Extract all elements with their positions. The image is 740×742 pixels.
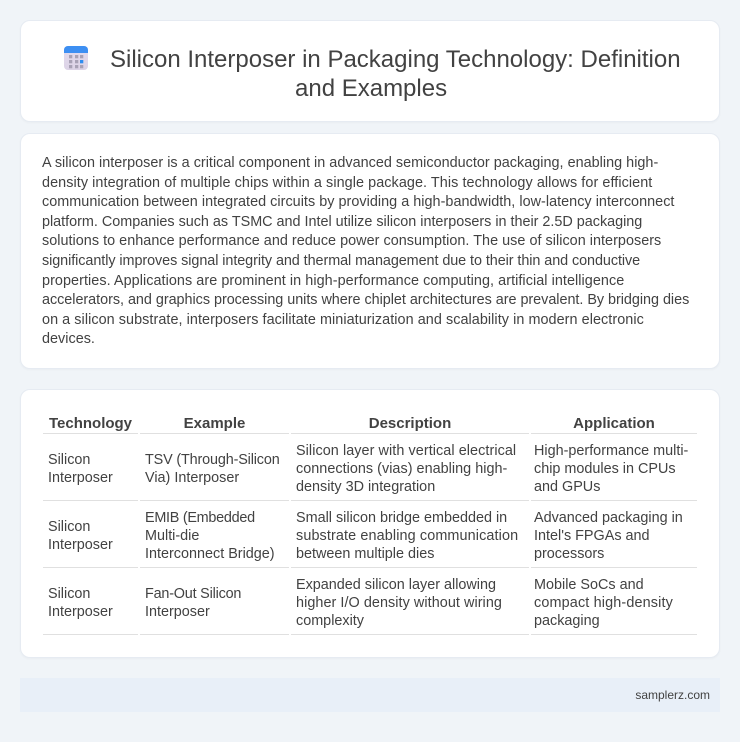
text block: intro paragraph bbox=[42, 155, 689, 347]
table row: EMIB: between multiple dies bbox=[296, 546, 434, 562]
table row: EMIB: Multi-die bbox=[145, 528, 199, 544]
icon: calendar grid chip bbox=[64, 46, 88, 70]
table row: EMIB: processors bbox=[534, 546, 604, 562]
table row: Fan-Out: packaging bbox=[534, 613, 600, 629]
table row: Fan-Out: higher I/O density without wiring bbox=[296, 595, 502, 611]
table row: EMIB bbox=[48, 510, 683, 562]
table header row bbox=[49, 415, 655, 432]
text block: intro paragraph: density integration of multiple chips within a single package. This technology allows for efficient bbox=[42, 175, 652, 191]
footer bar bbox=[20, 678, 720, 712]
table row: Fan-Out: compact high-density bbox=[534, 595, 673, 611]
text block: intro paragraph: significantly improves signal integrity and thermal management due to their thin and conductive bbox=[42, 253, 640, 269]
table row: EMIB: Advanced packaging in bbox=[534, 510, 683, 526]
table: technology examples bbox=[43, 415, 697, 635]
table row: EMIB: Interconnect Bridge) bbox=[145, 546, 275, 562]
table row: Fan-Out: Expanded silicon layer allowing bbox=[296, 577, 496, 593]
table row: TSV: Silicon bbox=[48, 452, 90, 468]
heading: title: Silicon Interposer in Packaging Technology: Definition bbox=[110, 46, 681, 73]
table row: Fan-Out: Mobile SoCs and bbox=[534, 577, 644, 593]
heading: title bbox=[110, 46, 681, 102]
table header row: Technology bbox=[49, 415, 132, 432]
table row: Fan-Out: complexity bbox=[296, 613, 364, 629]
table row: TSV: High-performance multi- bbox=[534, 443, 688, 459]
text block: intro paragraph: solutions to enhance performance and reduce power consumption. The use of silicon interposers bbox=[42, 233, 661, 249]
table row: Fan-Out: Interposer bbox=[145, 604, 210, 620]
table header row: Application bbox=[573, 415, 655, 432]
table header row: Example bbox=[184, 415, 245, 432]
panel: table card bbox=[20, 389, 720, 658]
table row: EMIB: substrate enabling communication bbox=[296, 528, 518, 544]
text block: intro paragraph: on a silicon substrate, interposers facilitate miniaturization and scalability in modern electronic bbox=[42, 312, 644, 328]
text block: intro paragraph: accelerators, and graphics processing units where chiplet architectures are prevalent. By bridging dies bbox=[42, 292, 689, 308]
table row: EMIB: Small silicon bridge embedded in bbox=[296, 510, 507, 526]
table header row: Description bbox=[369, 415, 451, 432]
table row: TSV: Silicon layer with vertical electrical bbox=[296, 443, 516, 459]
table row: TSV: chip modules in CPUs bbox=[534, 461, 676, 477]
table row: TSV: Via) Interposer bbox=[145, 470, 239, 486]
table row: TSV bbox=[48, 443, 688, 495]
table row: EMIB: EMIB (Embedded bbox=[145, 510, 255, 526]
panel: intro paragraph card bbox=[20, 133, 720, 369]
text block: intro paragraph: A silicon interposer is a critical component in advanced semiconductor packaging, enabling high- bbox=[42, 155, 658, 171]
footer source text: samplerz.com bbox=[635, 688, 710, 702]
table row: Fan-Out bbox=[48, 577, 673, 629]
table row: TSV: and GPUs bbox=[534, 479, 600, 495]
text block: intro paragraph: devices. bbox=[42, 331, 95, 347]
table row: EMIB: Intel's FPGAs and bbox=[534, 528, 650, 544]
table row: Fan-Out: Silicon bbox=[48, 586, 90, 602]
table row: Fan-Out: Interposer bbox=[48, 604, 113, 620]
table row: EMIB: Interposer bbox=[48, 537, 113, 553]
heading: title: and Examples bbox=[295, 75, 447, 102]
panel: title card bbox=[20, 20, 720, 122]
table row: TSV: connections (vias) enabling high- bbox=[296, 461, 507, 477]
text block: intro paragraph: communication between integrated circuits by providing a high-bandwidth, low-latency interconnect bbox=[42, 194, 674, 210]
table row: TSV: density 3D integration bbox=[296, 479, 435, 495]
table row: EMIB: Silicon bbox=[48, 519, 90, 535]
table row: Fan-Out: Fan-Out Silicon bbox=[145, 586, 241, 602]
table row: TSV: Interposer bbox=[48, 470, 113, 486]
text block: intro paragraph: platform. Companies such as TSMC and Intel utilize silicon interposers in their 2.5D packaging bbox=[42, 214, 642, 230]
table row: TSV: TSV (Through-Silicon bbox=[145, 452, 280, 468]
text block: intro paragraph: properties. Applications are prominent in high-performance computing, artificial intelligence bbox=[42, 273, 624, 289]
